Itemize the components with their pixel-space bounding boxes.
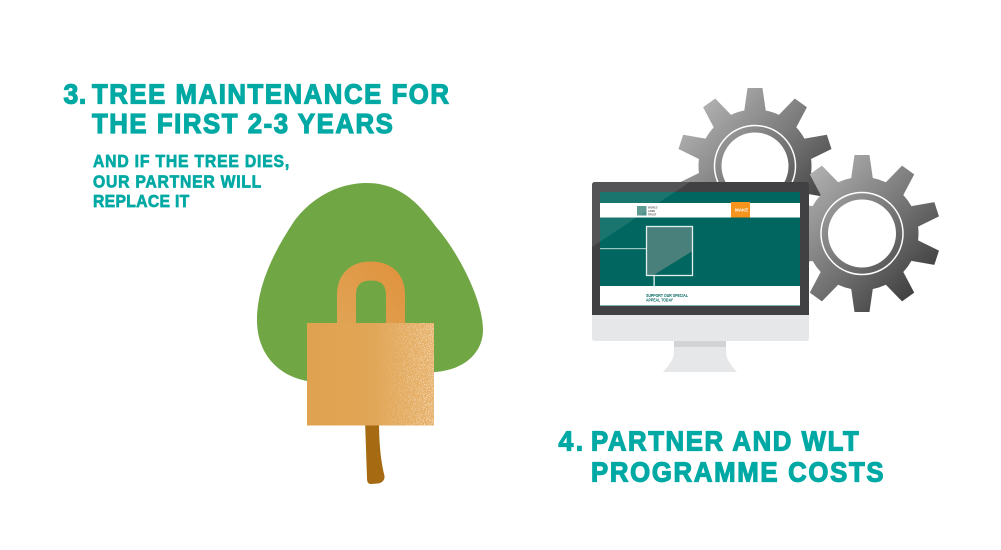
website footer: [600, 286, 800, 306]
left connector line: [600, 248, 646, 249]
orange button: MAKE: [735, 208, 748, 212]
footer text: SUPPORT OUR SPECIAL: [646, 293, 688, 298]
website logo: LAND: [648, 210, 655, 213]
screen glare: [592, 182, 690, 247]
heading: step 4: 4.: [558, 425, 583, 457]
website header bar: [600, 203, 800, 218]
heading: step 3: 3.: [64, 78, 86, 110]
footer text: APPEAL TODAY: [646, 298, 673, 302]
padlock shackle: [346, 271, 396, 325]
tree canopy: [257, 183, 483, 381]
text block: tree replacement note: REPLACE IT: [93, 191, 189, 211]
text block: tree replacement note: [93, 151, 289, 211]
icon: tree with padlock: [257, 183, 483, 484]
heading: step 4: PROGRAMME COSTS: [591, 457, 884, 488]
website logo: [637, 206, 658, 216]
heading: step 4: [558, 425, 884, 488]
tree trunk: [365, 420, 385, 484]
monitor chin: [592, 315, 809, 341]
orange button: [731, 202, 750, 218]
icon: gears: [678, 88, 939, 312]
website logo: TRUST: [648, 214, 657, 216]
monitor stand: [663, 341, 737, 372]
monitor bezel: [592, 182, 809, 315]
image frame: [646, 226, 692, 276]
connector line: [654, 276, 655, 286]
gear: back: [678, 88, 832, 196]
screen background: [600, 192, 800, 306]
heading: step 3: THE FIRST 2-3 YEARS: [92, 108, 393, 139]
heading: step 4: PARTNER AND WLT: [591, 426, 859, 457]
padlock body: [307, 323, 434, 426]
heading: step 3: [64, 78, 449, 139]
heading: step 3: TREE MAINTENANCE FOR: [92, 79, 449, 110]
icon: desktop monitor: [592, 182, 809, 372]
text block: tree replacement note: AND IF THE TREE DIES,: [93, 151, 289, 171]
footer text: [646, 293, 688, 302]
gear: front: [809, 155, 939, 312]
website logo: WORLD: [648, 206, 658, 210]
text block: tree replacement note: OUR PARTNER WILL: [93, 172, 261, 192]
